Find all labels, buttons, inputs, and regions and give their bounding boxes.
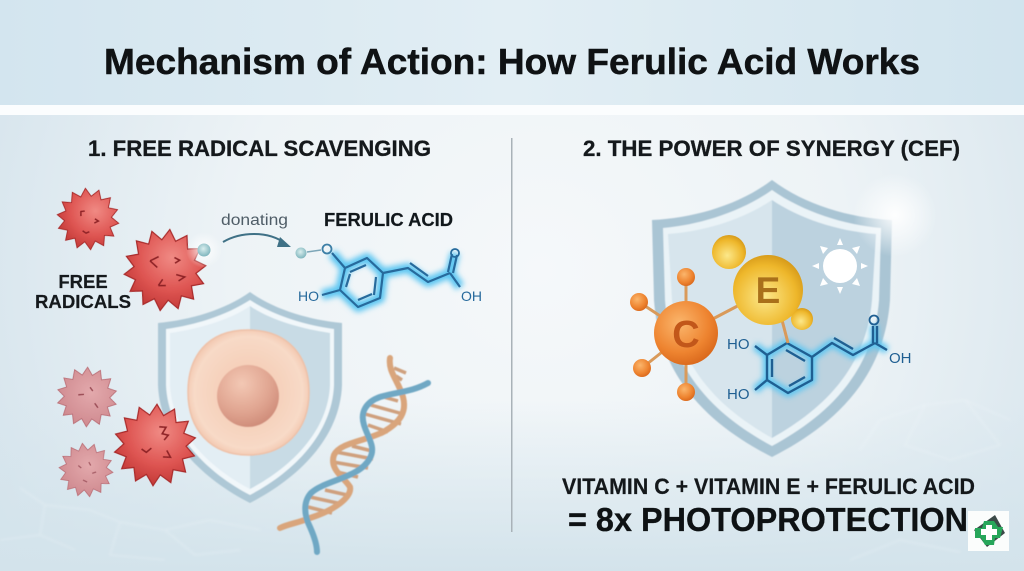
header band <box>0 0 1024 105</box>
label: free radicals: RADICALS <box>35 291 131 312</box>
free radical: pale lower <box>57 442 115 498</box>
free radical: donor <box>120 226 210 314</box>
label: free radicals: FREE <box>58 271 108 292</box>
free radical: top <box>53 185 123 253</box>
panel: power of synergy <box>562 136 975 538</box>
letter C: C <box>672 314 700 356</box>
heading: panel 2: 2. THE POWER OF SYNERGY (CEF) <box>583 136 960 161</box>
logo badge <box>968 511 1009 551</box>
letter E: E <box>756 270 780 311</box>
cell nucleus <box>217 365 279 427</box>
right molecule glow <box>755 325 887 393</box>
molecule glow <box>322 253 460 307</box>
label: donating: donating <box>221 212 288 229</box>
right molecule oxygen <box>870 316 878 324</box>
title: Mechanism of Action: How Ferulic Acid Works <box>104 41 920 82</box>
background water texture <box>0 400 1010 560</box>
vitamin bonds <box>639 277 788 392</box>
label: OH: OH <box>461 288 482 304</box>
center divider <box>511 138 512 532</box>
dna rungs <box>308 368 406 513</box>
formula line: VITAMIN C + VITAMIN E + FERULIC ACID <box>562 474 975 499</box>
label: HO: HO <box>298 288 319 304</box>
dna blue strand <box>305 383 428 552</box>
label: OH right: OH <box>889 350 912 367</box>
cell <box>188 330 309 455</box>
result line: = 8x PHOTOPROTECTION <box>568 501 968 538</box>
label: ferulic acid: FERULIC ACID <box>324 209 453 230</box>
icon: sun <box>812 238 868 294</box>
molecule: ferulic acid right <box>727 316 912 403</box>
free radical: attacking <box>108 399 202 491</box>
label: HO lower: HO <box>727 386 750 403</box>
lower background wash <box>0 400 1024 571</box>
dna orange strand <box>280 358 404 528</box>
molecule: ferulic acid <box>296 244 482 307</box>
shield: synergy <box>652 180 892 457</box>
panel: free radical scavenging <box>35 136 482 552</box>
dna helix <box>280 358 428 552</box>
free radical: pale upper <box>51 362 123 432</box>
shield: cell protection <box>158 292 342 503</box>
molecule: vitamin C <box>630 268 718 401</box>
header separator <box>0 105 1024 115</box>
oxygen and hydrogen atoms <box>296 244 459 258</box>
hydrogen atom: donated <box>186 232 222 268</box>
heading: panel 1: 1. FREE RADICAL SCAVENGING <box>88 136 431 161</box>
right molecule bonds <box>755 326 887 393</box>
molecule bonds <box>322 253 460 307</box>
logo mark <box>974 515 1005 547</box>
molecule: vitamin E <box>712 235 813 330</box>
arrow: hydrogen donation <box>223 234 291 247</box>
highlight glare <box>853 173 937 257</box>
label: HO upper: HO <box>727 336 750 353</box>
